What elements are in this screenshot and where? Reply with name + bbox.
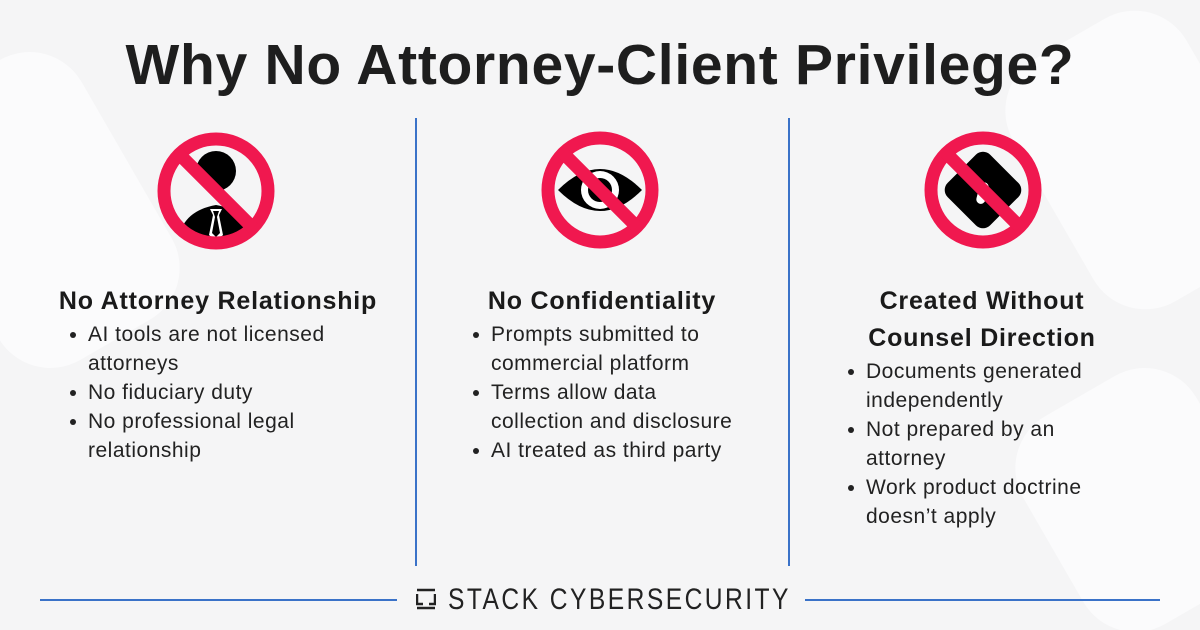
bullets col 2 xyxy=(473,323,732,462)
logo text: STACK CYBERSECURITY xyxy=(448,583,791,616)
icon: no person xyxy=(158,132,274,250)
bullets col 2: collection and disclosure xyxy=(491,410,732,433)
bullets col 2: Terms allow data xyxy=(491,381,657,404)
heading col 1: No Attorney Relationship xyxy=(59,287,377,315)
bullets col 2: AI treated as third party xyxy=(491,439,722,462)
footer line right xyxy=(805,599,1160,601)
divider left xyxy=(415,118,417,566)
bullets col 1 xyxy=(70,323,325,462)
divider right xyxy=(788,118,790,566)
logo xyxy=(416,583,791,616)
bullets col 1: relationship xyxy=(88,439,201,462)
bullets col 1: No fiduciary duty xyxy=(88,381,253,404)
bullets col 2: commercial platform xyxy=(491,352,690,375)
bullets col 3 xyxy=(848,360,1082,528)
logo icon xyxy=(416,588,436,610)
heading col 3: Created Without xyxy=(880,287,1084,315)
bullets col 3: doesn’t apply xyxy=(866,505,996,528)
icon: no eye xyxy=(542,132,658,248)
bullets col 3: Work product doctrine xyxy=(866,476,1082,499)
icon: no document xyxy=(924,132,1042,248)
heading col 2: No Confidentiality xyxy=(488,287,716,315)
title: Why No Attorney-Client Privilege? xyxy=(126,33,1074,97)
bullets col 1: AI tools are not licensed xyxy=(88,323,325,346)
bullets col 3: Documents generated xyxy=(866,360,1082,383)
bullets col 3: independently xyxy=(866,389,1003,412)
bullets col 2: Prompts submitted to xyxy=(491,323,699,346)
footer line left xyxy=(40,599,397,601)
heading col 3: Counsel Direction xyxy=(868,324,1096,352)
bullets col 1: attorneys xyxy=(88,352,179,375)
bullets col 1: No professional legal xyxy=(88,410,295,433)
heading col 3 xyxy=(868,287,1096,352)
bullets col 3: Not prepared by an xyxy=(866,418,1055,441)
bullets col 3: attorney xyxy=(866,447,946,470)
